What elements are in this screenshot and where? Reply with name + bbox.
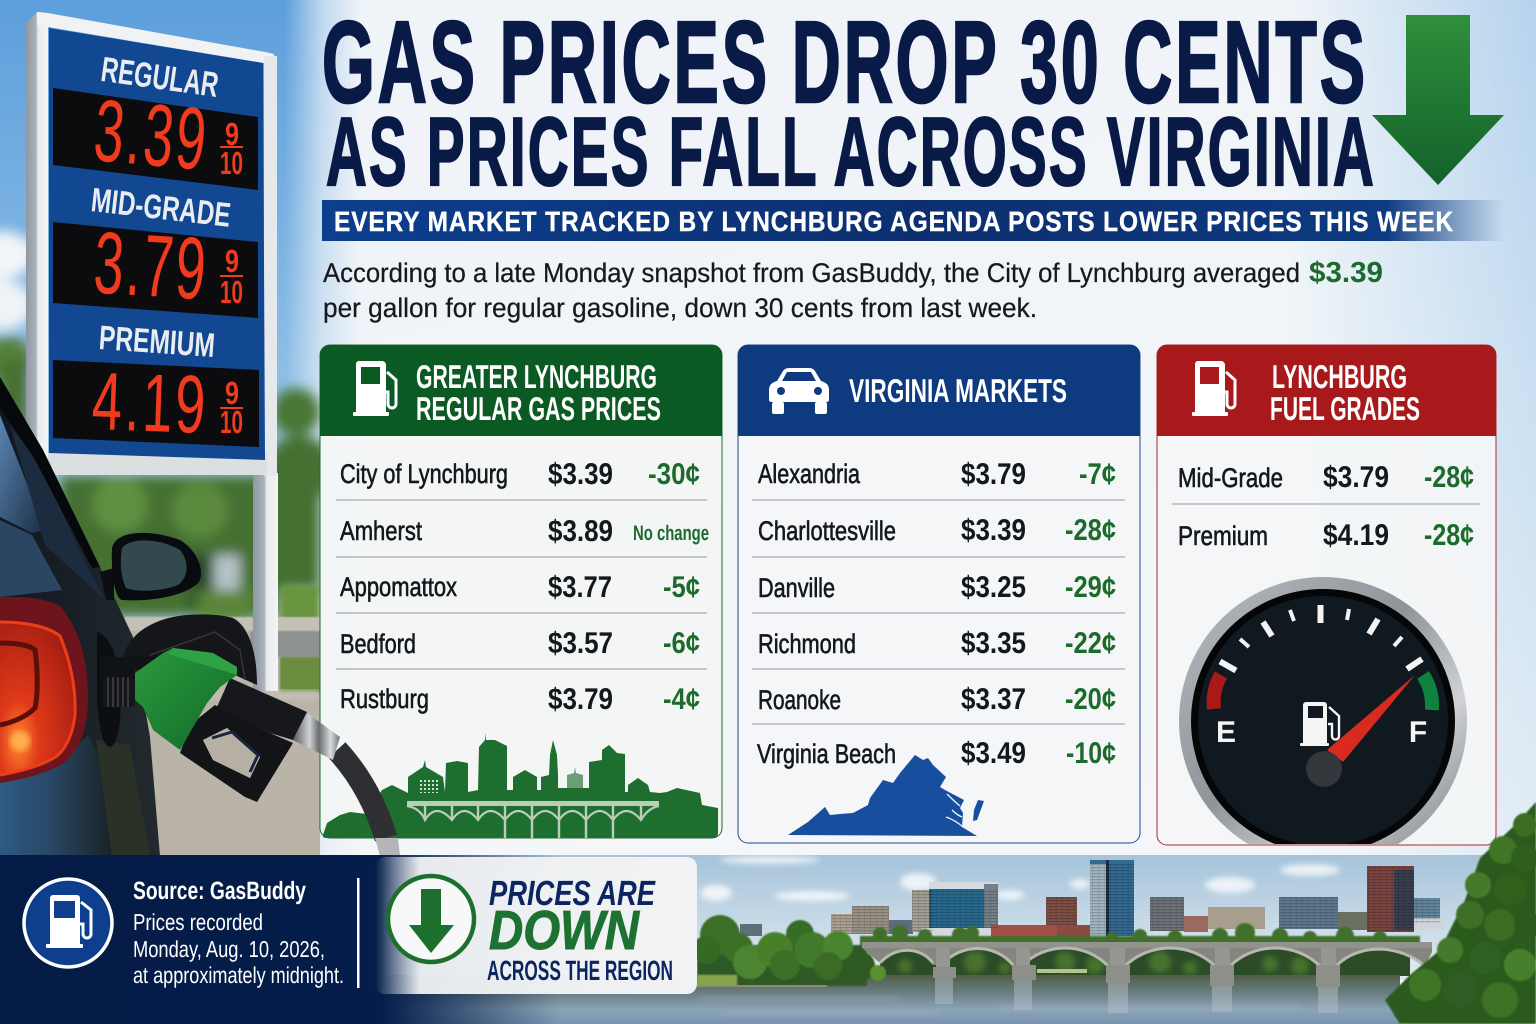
row: charlottesville: Charlottesville xyxy=(758,516,896,546)
row: premium: $4.19 xyxy=(1323,519,1389,552)
icon: pump xyxy=(1300,702,1339,746)
tick marks xyxy=(1220,605,1422,670)
right upright xyxy=(264,56,277,476)
skyline illustration xyxy=(323,733,718,838)
reflections xyxy=(935,978,1338,1013)
heading xyxy=(416,358,661,427)
icon: down arrow in circle xyxy=(388,876,474,962)
green nozzle body xyxy=(135,648,237,750)
bank strip xyxy=(1037,969,1087,973)
heading: VIRGINIA MARKETS xyxy=(849,372,1067,409)
source text: Source: GasBuddy xyxy=(133,877,306,905)
row: danville: Danville xyxy=(758,573,835,603)
LED price: 3.79: 3.79 xyxy=(91,213,211,318)
fraction: 10 xyxy=(220,274,243,310)
photo: river skyline xyxy=(380,802,1536,1024)
roof rail xyxy=(0,377,100,568)
row: mid-grade: $3.79 xyxy=(1323,461,1389,494)
callout text: PRICES ARE xyxy=(489,874,656,913)
row: rustburg: $3.79 xyxy=(548,683,613,716)
full zone xyxy=(1423,675,1432,710)
price sign xyxy=(26,12,278,691)
E label: E xyxy=(1216,716,1236,749)
source text: Prices recorded xyxy=(133,909,263,935)
row: roanoke: $3.37 xyxy=(961,683,1026,716)
panel: lynchburg fuel grades xyxy=(1157,345,1496,865)
bank edge xyxy=(697,985,827,987)
row: alexandria: Alexandria xyxy=(758,459,861,489)
lower door panel xyxy=(0,735,112,856)
row divider xyxy=(1172,503,1480,505)
blue face xyxy=(49,28,265,460)
car xyxy=(0,377,201,856)
LED price: 3.39: 3.39 xyxy=(90,80,213,189)
needle xyxy=(1327,675,1415,762)
filler opening xyxy=(97,632,121,747)
far bank trees under bridge xyxy=(880,946,1410,976)
heading: LYNCHBURG xyxy=(1272,358,1407,395)
row: bedford: -6¢ xyxy=(663,627,700,660)
row: virginia beach: $3.49 xyxy=(961,737,1026,770)
filler collar xyxy=(100,657,160,707)
panel: virginia markets xyxy=(738,345,1140,843)
intro paragraph: $3.39 xyxy=(1309,257,1383,289)
row: city of lynchburg: -30¢ xyxy=(648,458,700,491)
fraction: 9 xyxy=(225,375,239,411)
source block xyxy=(24,877,344,988)
header bar xyxy=(320,345,722,436)
row: appomattox: Appomattox xyxy=(340,572,457,602)
F label: F xyxy=(1409,716,1427,749)
row: roanoke xyxy=(758,683,1116,716)
lever xyxy=(212,732,258,772)
row: appomattox xyxy=(340,571,700,604)
intro paragraph: per gallon for regular gasoline, down 30 cents from last week. xyxy=(323,293,1037,323)
icon: green down arrow xyxy=(1372,15,1504,185)
row: rustburg: -4¢ xyxy=(663,683,700,716)
source text xyxy=(133,877,344,988)
row: rustburg xyxy=(340,683,700,716)
fraction xyxy=(220,375,243,440)
row: bedford: Bedford xyxy=(340,629,416,659)
chrome collar xyxy=(293,713,340,760)
spandrels xyxy=(862,948,1432,966)
sign post below xyxy=(253,473,278,691)
fraction xyxy=(220,243,243,310)
map of virginia xyxy=(788,755,984,836)
row: city of lynchburg: $3.39 xyxy=(548,458,613,491)
row: premium xyxy=(1178,519,1474,552)
row dividers xyxy=(752,500,1125,724)
bridge xyxy=(862,942,1432,1013)
left tree clump xyxy=(692,915,886,986)
arch ribs xyxy=(880,948,1425,966)
row: alexandria xyxy=(758,458,1116,491)
side window xyxy=(10,425,105,600)
LED panel: mid-grade xyxy=(53,222,258,318)
fraction: 10 xyxy=(220,404,243,440)
icon: fuel pump xyxy=(1192,361,1235,416)
intro paragraph xyxy=(323,257,1383,323)
panel: greater lynchburg xyxy=(320,345,722,838)
icon: fuel pump xyxy=(353,361,396,416)
hose lower faded xyxy=(375,838,400,856)
row: amherst: $3.89 xyxy=(548,515,613,548)
row: danville: -29¢ xyxy=(1065,571,1116,604)
vertical divider xyxy=(357,878,360,988)
water streaks xyxy=(700,996,1300,1016)
row: charlottesville: $3.39 xyxy=(961,514,1026,547)
LED panel: regular xyxy=(53,88,258,190)
row: alexandria: -7¢ xyxy=(1079,458,1116,491)
heading: FUEL GRADES xyxy=(1270,390,1420,427)
row: bedford xyxy=(340,627,700,660)
intro paragraph: According to a late Monday snapshot from GasBuddy, the City of Lynchburg averaged xyxy=(323,258,1300,288)
row: virginia beach: Virginia Beach xyxy=(757,739,896,769)
fuel nozzle and hose xyxy=(97,614,400,856)
label: mid-grade: MID-GRADE xyxy=(89,181,233,235)
water xyxy=(380,975,1400,1024)
sky xyxy=(380,855,1536,980)
distant tree line xyxy=(860,923,1420,946)
handle xyxy=(217,678,307,740)
row: bedford: $3.57 xyxy=(548,627,613,660)
row: charlottesville xyxy=(758,514,1116,547)
fraction: 9 xyxy=(225,243,239,279)
row: amherst: No change xyxy=(633,522,709,545)
source text: at approximately midnight. xyxy=(133,962,344,988)
bottom rail xyxy=(48,453,267,475)
LED price: 4.19: 4.19 xyxy=(90,356,210,451)
row: city of lynchburg xyxy=(340,458,700,491)
rear window xyxy=(0,415,45,533)
row: roanoke: -20¢ xyxy=(1065,683,1116,716)
heading: GREATER LYNCHBURG xyxy=(416,358,657,395)
hose xyxy=(337,750,386,838)
row: virginia beach xyxy=(757,737,1116,770)
row: danville xyxy=(758,571,1116,604)
footer navy band xyxy=(0,855,560,1024)
row dividers xyxy=(336,500,707,669)
row: mid-grade: Mid-Grade xyxy=(1178,463,1283,493)
pale wash behind content xyxy=(285,0,1536,856)
left upright xyxy=(26,12,48,470)
fraction xyxy=(220,116,243,181)
callout: prices are down xyxy=(375,857,697,994)
heading xyxy=(1270,358,1420,427)
row: richmond xyxy=(758,627,1116,660)
callout text: ACROSS THE REGION xyxy=(487,955,673,986)
row: richmond: $3.35 xyxy=(961,627,1026,660)
car body xyxy=(0,377,160,856)
fuel gauge xyxy=(1179,577,1467,865)
row: rustburg: Rustburg xyxy=(340,684,429,714)
rear body panel xyxy=(0,520,62,597)
buildings xyxy=(740,860,1444,942)
row: alexandria: $3.79 xyxy=(961,458,1026,491)
trigger guard xyxy=(180,705,293,802)
fraction: 10 xyxy=(220,145,243,181)
row: amherst xyxy=(340,515,709,548)
tail light xyxy=(0,597,88,783)
row: city of lynchburg: City of Lynchburg xyxy=(340,459,508,489)
left photo scenery: clouds, trees, road xyxy=(0,231,334,858)
row: roanoke: Roanoke xyxy=(758,685,841,715)
row: premium: -28¢ xyxy=(1424,519,1474,552)
label: regular: REGULAR xyxy=(99,50,221,105)
row: appomattox: -5¢ xyxy=(663,571,700,604)
clouds xyxy=(700,856,1340,901)
row: amherst: Amherst xyxy=(340,516,422,546)
row: charlottesville: -28¢ xyxy=(1065,514,1116,547)
row: appomattox: $3.77 xyxy=(548,571,612,604)
row: danville: $3.25 xyxy=(961,571,1026,604)
LED panel: premium xyxy=(53,360,259,447)
side mirror xyxy=(100,533,201,600)
row: mid-grade: -28¢ xyxy=(1424,461,1474,494)
right foreground trees xyxy=(1385,802,1536,1024)
icon: pump in circle xyxy=(24,879,112,967)
header bar xyxy=(738,345,1140,436)
row: mid-grade xyxy=(1178,461,1474,494)
title xyxy=(322,0,1376,206)
row: premium: Premium xyxy=(1178,521,1268,551)
fuel door xyxy=(123,614,257,685)
source text: Monday, Aug. 10, 2026, xyxy=(133,936,325,962)
label: premium: PREMIUM xyxy=(98,319,216,365)
callout text: DOWN xyxy=(489,899,640,961)
top rail xyxy=(37,12,274,64)
callout text xyxy=(487,874,673,986)
fraction: 9 xyxy=(225,116,239,152)
needle hub xyxy=(1306,751,1342,787)
header bar xyxy=(1157,345,1496,436)
row: richmond: Richmond xyxy=(758,629,856,659)
row: richmond: -22¢ xyxy=(1065,627,1116,660)
heading: REGULAR GAS PRICES xyxy=(416,390,661,427)
icon: car xyxy=(769,368,829,414)
empty zone xyxy=(1214,675,1221,709)
piers xyxy=(936,948,1336,967)
row: virginia beach: -10¢ xyxy=(1066,737,1116,770)
